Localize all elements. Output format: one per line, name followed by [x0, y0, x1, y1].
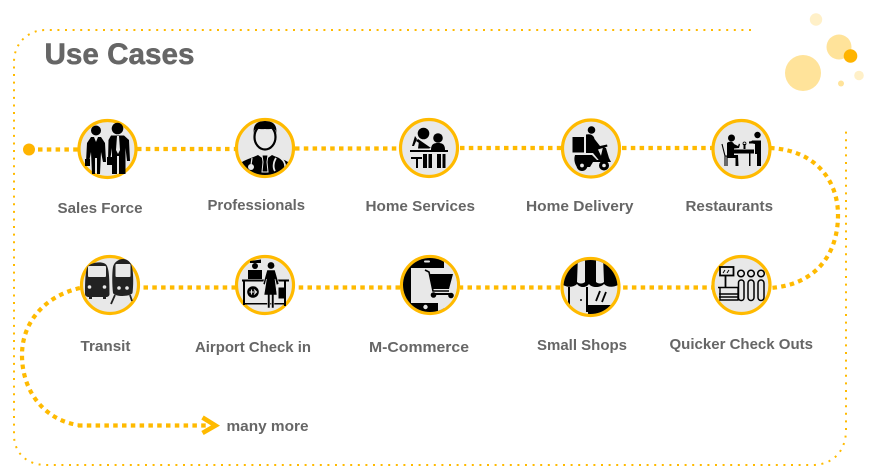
icon: home services	[400, 120, 458, 176]
icon: sales force	[79, 120, 136, 178]
decorative bubbles	[785, 13, 864, 91]
icon: m-commerce	[400, 256, 460, 314]
label: home services: Home Services	[366, 198, 475, 215]
label: sales force: Sales Force	[58, 200, 142, 217]
icon: professionals	[236, 120, 294, 180]
icon: home delivery	[562, 120, 620, 177]
icon: quicker check outs	[713, 256, 770, 314]
label: quicker check outs: Quicker Check Outs	[670, 336, 813, 353]
label: professionals: Professionals	[208, 197, 305, 214]
label: transit: Transit	[80, 338, 130, 355]
dotted route path	[22, 148, 838, 426]
icon: transit	[82, 256, 138, 314]
label: airport check in: Airport Check in	[195, 339, 311, 356]
arrow head	[202, 418, 216, 433]
many more label: many more	[226, 418, 308, 435]
start dot	[23, 144, 35, 156]
icon: small shops	[560, 256, 622, 316]
label: small shops: Small Shops	[537, 337, 627, 354]
label: restaurants: Restaurants	[686, 198, 773, 215]
label: m-commerce: M-Commerce	[369, 339, 469, 356]
icon: airport check in	[236, 256, 294, 314]
title: Use Cases	[44, 38, 194, 71]
icon: restaurants	[713, 120, 770, 178]
label: home delivery: Home Delivery	[526, 198, 634, 215]
